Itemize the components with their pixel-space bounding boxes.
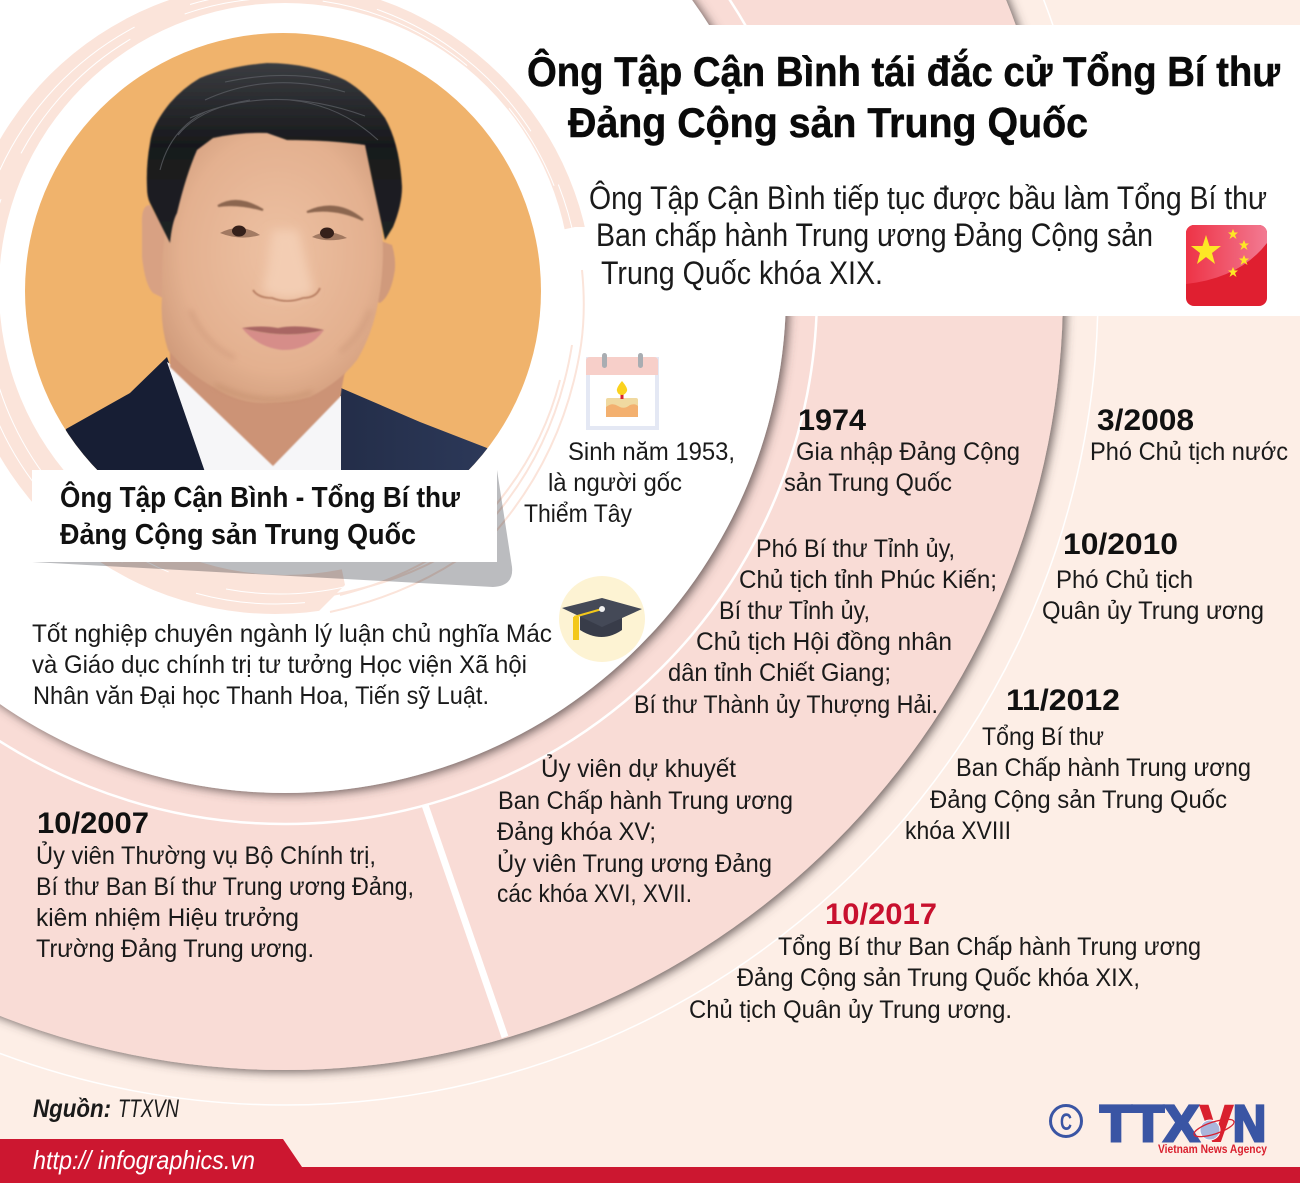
timeline: provincial posts: Chủ tịch tỉnh Phúc Kiến; <box>739 566 997 594</box>
footer red bar <box>0 1139 1300 1183</box>
icon: China flag <box>1186 225 1267 306</box>
timeline: 10/2007: kiêm nhiệm Hiệu trưởng <box>36 904 299 932</box>
source <box>33 1095 180 1123</box>
timeline: central committee: Ban Chấp hành Trung ương <box>498 787 793 815</box>
timeline: central committee: Ủy viên Trung ương Đảng <box>497 848 772 878</box>
intro text <box>589 180 1267 291</box>
timeline: provincial posts <box>634 535 997 719</box>
title: Đảng Cộng sản Trung Quốc <box>568 99 1088 146</box>
intro text: Ban chấp hành Trung ương Đảng Cộng sản <box>596 217 1153 253</box>
timeline: 11/2012: khóa XVIII <box>905 817 1011 845</box>
timeline: provincial posts: Bí thư Tỉnh ủy, <box>719 597 870 625</box>
timeline: 10/2017: Tổng Bí thư Ban Chấp hành Trung ương <box>778 933 1201 961</box>
birth text: Sinh năm 1953, <box>568 438 735 466</box>
birth text <box>524 438 735 528</box>
timeline: 10/2017 <box>689 898 1201 1024</box>
timeline: 10/2017: Đảng Cộng sản Trung Quốc khóa XIX, <box>737 964 1140 992</box>
timeline: 10/2010: 10/2010 <box>1063 528 1178 561</box>
timeline: provincial posts: Phó Bí thư Tỉnh ủy, <box>756 535 955 563</box>
logo: TTXVN: N <box>1233 1095 1266 1152</box>
icon: birthday calendar <box>586 353 658 428</box>
education text: Nhân văn Đại học Thanh Hoa, Tiến sỹ Luật. <box>33 682 489 710</box>
intro text: Trung Quốc khóa XIX. <box>601 255 883 291</box>
timeline: 10/2007: Ủy viên Thường vụ Bộ Chính trị, <box>36 840 376 870</box>
timeline: central committee: Ủy viên dự khuyết <box>541 753 736 783</box>
logo: TTXVN: Vietnam News Agency <box>1158 1142 1267 1156</box>
logo: TTXVN <box>1100 1095 1267 1156</box>
timeline: 3/2008 <box>1090 404 1288 466</box>
timeline: 10/2010: Phó Chủ tịch <box>1056 566 1193 594</box>
outer thin arc <box>0 0 1098 1105</box>
timeline: 1974: sản Trung Quốc <box>784 469 952 497</box>
facial features <box>190 201 370 400</box>
timeline: 10/2010 <box>1042 528 1264 625</box>
timeline: 11/2012: 11/2012 <box>1006 684 1120 717</box>
timeline: 10/2017: Chủ tịch Quân ủy Trung ương. <box>689 996 1012 1024</box>
label text: Đảng Cộng sản Trung Quốc <box>60 519 416 551</box>
timeline ring <box>0 0 1063 1070</box>
timeline: 10/2007: 10/2007 <box>37 807 149 840</box>
timeline: 3/2008: Phó Chủ tịch nước <box>1090 438 1288 466</box>
timeline: provincial posts: Bí thư Thành ủy Thượng Hải. <box>634 691 938 719</box>
logo: TTXVN: TTX <box>1100 1095 1199 1152</box>
timeline: 11/2012: Tổng Bí thư <box>982 723 1104 751</box>
timeline: 10/2017: 10/2017 <box>825 898 937 931</box>
education text: Tốt nghiệp chuyên ngành lý luận chủ nghĩa Mác <box>32 620 552 648</box>
top white banner <box>540 25 1300 316</box>
ring divider <box>425 805 505 1037</box>
central white circle <box>0 0 786 793</box>
timeline: 3/2008: 3/2008 <box>1097 404 1194 437</box>
icon: graduation cap <box>559 576 645 662</box>
footer url: http:// infographics.vn <box>33 1145 255 1175</box>
label shadow <box>32 470 512 587</box>
education text <box>32 620 552 710</box>
timeline: central committee <box>497 753 793 908</box>
timeline: central committee: Đảng khóa XV; <box>497 818 656 846</box>
source: TTXVN <box>118 1095 180 1123</box>
brush ring around portrait <box>0 0 593 614</box>
timeline: 11/2012 <box>905 684 1251 845</box>
logo: TTXVN: V <box>1200 1095 1233 1152</box>
portrait figure <box>50 63 520 480</box>
timeline: provincial posts: Chủ tịch Hội đồng nhân <box>696 628 952 656</box>
timeline: 11/2012: Ban Chấp hành Trung ương <box>956 754 1251 782</box>
timeline: 10/2007 <box>36 807 414 963</box>
label box <box>32 470 497 562</box>
timeline: 10/2007: Bí thư Ban Bí thư Trung ương Đảng, <box>36 873 414 901</box>
source: Nguồn: <box>33 1095 111 1123</box>
icon: copyright: C <box>1060 1109 1072 1136</box>
timeline: 1974 <box>784 404 1020 497</box>
portrait background <box>25 33 541 549</box>
education text: và Giáo dục chính trị tư tưởng Học viện Xã hội <box>32 651 527 679</box>
label text: Ông Tập Cận Bình - Tổng Bí thư <box>60 480 460 514</box>
timeline: 1974: 1974 <box>798 404 866 437</box>
birth text: Thiểm Tây <box>524 500 632 528</box>
timeline: 11/2012: Đảng Cộng sản Trung Quốc <box>930 786 1227 814</box>
timeline: central committee: các khóa XVI, XVII. <box>497 880 692 908</box>
timeline: 10/2007: Trường Đảng Trung ương. <box>36 935 314 963</box>
label text <box>60 480 460 551</box>
birth text: là người gốc <box>548 469 682 497</box>
portrait <box>25 33 541 470</box>
icon: copyright <box>1050 1106 1082 1136</box>
caption label <box>32 470 512 587</box>
inner thin arc <box>0 0 817 824</box>
title <box>527 47 1281 146</box>
timeline: provincial posts: dân tỉnh Chiết Giang; <box>668 659 891 687</box>
timeline: 10/2010: Quân ủy Trung ương <box>1042 597 1264 625</box>
timeline: 1974: Gia nhập Đảng Cộng <box>796 438 1020 466</box>
